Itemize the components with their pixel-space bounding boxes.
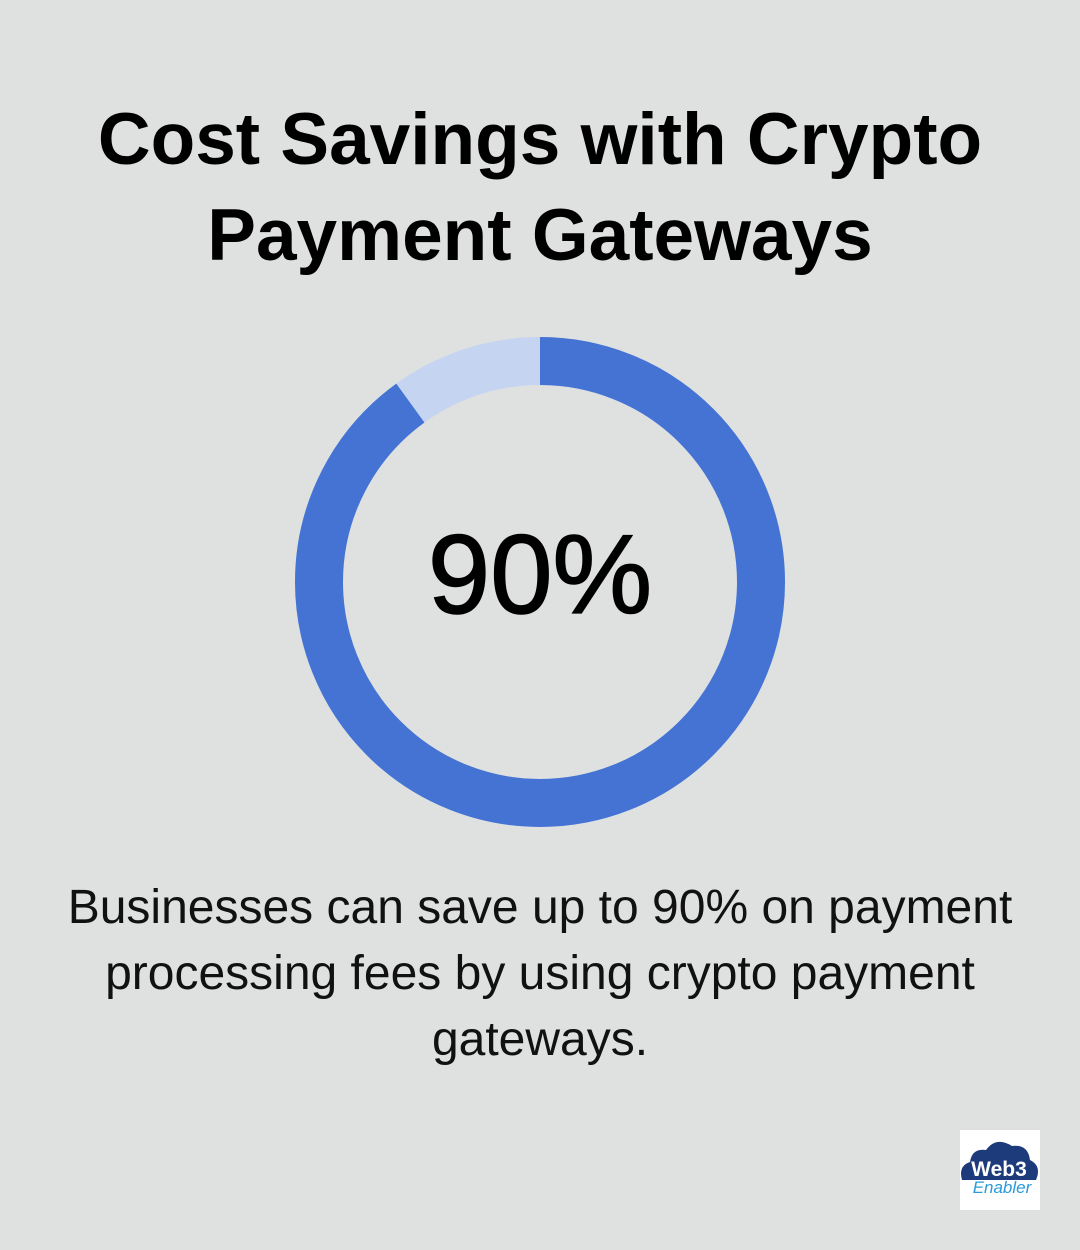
stat value: 90% xyxy=(428,512,652,637)
title: Payment Gateways xyxy=(207,195,873,276)
logo xyxy=(960,1130,1040,1210)
logo: Enabler xyxy=(973,1178,1033,1197)
title xyxy=(98,99,982,276)
donut chart xyxy=(295,337,785,827)
logo: Web3 xyxy=(971,1158,1027,1181)
title: Cost Savings with Crypto xyxy=(98,99,982,180)
description: Businesses can save up to 90% on payment processing fees by using crypto payment gateways. xyxy=(68,881,1012,1066)
